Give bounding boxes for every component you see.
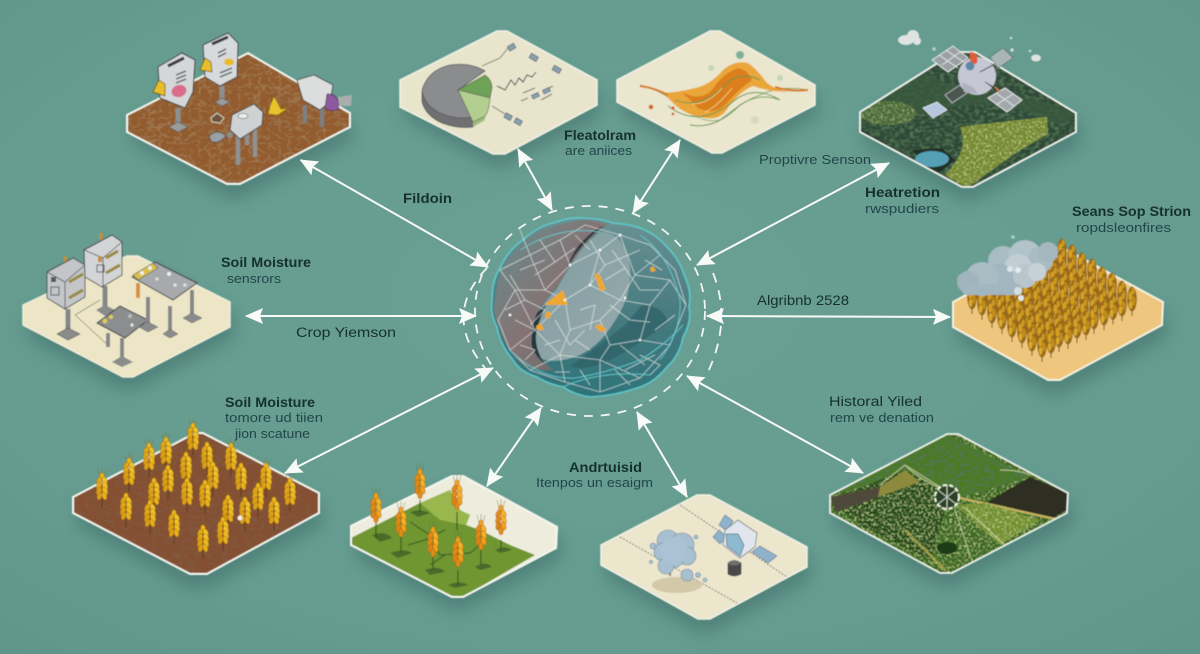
control box left [47, 256, 85, 340]
hardware surface [23, 256, 230, 377]
central network brain [492, 218, 690, 397]
label: Soil Moisture sensors: sensrors [227, 271, 282, 286]
label: Soil Moisture lower: Soil Moisture [225, 395, 316, 410]
wave surface [617, 31, 815, 153]
label: Seans Sop Strion: Seans Sop Strion [1072, 204, 1191, 219]
tile: soil sensors [127, 33, 352, 184]
label: Historal Yiled: Historal Yiled [829, 394, 922, 409]
label: Heatretion [865, 185, 940, 216]
tile: cloud and satellite plan [601, 495, 807, 619]
chart surface [400, 31, 597, 154]
label: Fleatolram: Fleatolram [564, 128, 636, 143]
pie chart [422, 64, 492, 128]
plan surface [601, 495, 807, 619]
tile: field hardware [23, 233, 230, 377]
left lobe [494, 220, 607, 370]
label: Soil Moisture lower [225, 395, 323, 441]
satellite [923, 46, 1022, 118]
centre lobe [532, 232, 630, 361]
outline on floor [75, 300, 110, 347]
sand surface [953, 248, 1163, 380]
walker sensor front [209, 104, 263, 165]
label: Soil Moisture lower: jion scatune [234, 426, 310, 441]
label: Heatretion: Heatretion [865, 185, 940, 200]
label: Soil Moisture sensors [221, 255, 312, 286]
cloud icon [649, 530, 707, 593]
arrow: wheat on soil link [285, 368, 493, 473]
arrow: satellite link [697, 163, 889, 265]
sensor box left [153, 53, 195, 132]
cyan contour lines [510, 230, 683, 387]
label: Historal Yiled: rem ve denation [830, 410, 934, 425]
clouds near satellite [898, 30, 1041, 62]
label: Algribnb 2528: Algribnb 2528 [757, 293, 849, 308]
rain cloud [957, 235, 1058, 301]
aerial surface [830, 434, 1068, 573]
dark lower folds [570, 305, 668, 368]
network lines [498, 225, 686, 392]
arrow: cloud plan link [637, 412, 687, 497]
yellow shard and stones [211, 96, 288, 123]
satellite icon [713, 515, 777, 576]
tile: pie chart [400, 31, 597, 154]
arrow: green field link [487, 408, 541, 486]
label: Soil Moisture sensors: Soil Moisture [221, 255, 312, 270]
arrow: soil sensors link [301, 160, 488, 267]
label: Historal Yiled [829, 394, 934, 425]
orange wave [640, 51, 808, 126]
sensor table back [132, 262, 202, 338]
label: Andrtuisid [536, 460, 653, 490]
tile: satellite over landscape [855, 30, 1080, 190]
tile: wave chart [617, 31, 815, 153]
label: Andrtuisid: Andrtuisid [569, 460, 642, 475]
arrow: pie chart link [518, 149, 552, 210]
sensor table front [97, 306, 148, 367]
label: Fildoin: Fildoin [403, 191, 452, 206]
glowing nodes [536, 266, 656, 332]
arrow: wave chart link [633, 140, 680, 213]
dashed rings [463, 206, 721, 416]
tile: aerial farmland [825, 430, 1075, 578]
label: Fleatolram: are aniices [565, 143, 633, 158]
soil surface [127, 53, 350, 184]
orange wheat stalks [370, 463, 507, 585]
dashed guide lines [620, 505, 787, 603]
label: Crop Yiemson: Crop Yiemson [296, 325, 396, 340]
control box right [84, 233, 122, 316]
label: Soil Moisture lower: tomore ud tiien [225, 410, 323, 425]
tile: wheat on soil [73, 418, 319, 574]
label: Seans Sop Strion: ropdsleonfires [1076, 220, 1172, 235]
walker sensor right [297, 75, 352, 127]
soil surface [73, 433, 319, 574]
green ground [351, 490, 535, 597]
arrow: aerial link [687, 376, 863, 473]
wheat plants [95, 418, 297, 559]
label: Heatretion: rwspudiers [865, 201, 940, 216]
label: Seans Sop Strion [1072, 204, 1191, 235]
arrow: hardware link [246, 315, 476, 317]
target globe marker [935, 485, 959, 509]
label: Fleatolram [564, 128, 636, 158]
tile: ripe wheat field [953, 235, 1163, 380]
chart line and data chips [482, 43, 561, 126]
arrow: ripe wheat link [707, 316, 950, 317]
label: Proptivre Senson: Proptivre Senson [759, 152, 871, 167]
network dots [509, 234, 641, 341]
tile: green field sprouts [351, 463, 557, 597]
wheat rows [967, 238, 1137, 362]
outer lobes [492, 218, 690, 397]
landscape surface [855, 48, 1080, 190]
sensor box right [200, 33, 238, 106]
white backdrop [351, 476, 557, 597]
label: Andrtuisid: Itenpos un esaigm [536, 475, 653, 490]
